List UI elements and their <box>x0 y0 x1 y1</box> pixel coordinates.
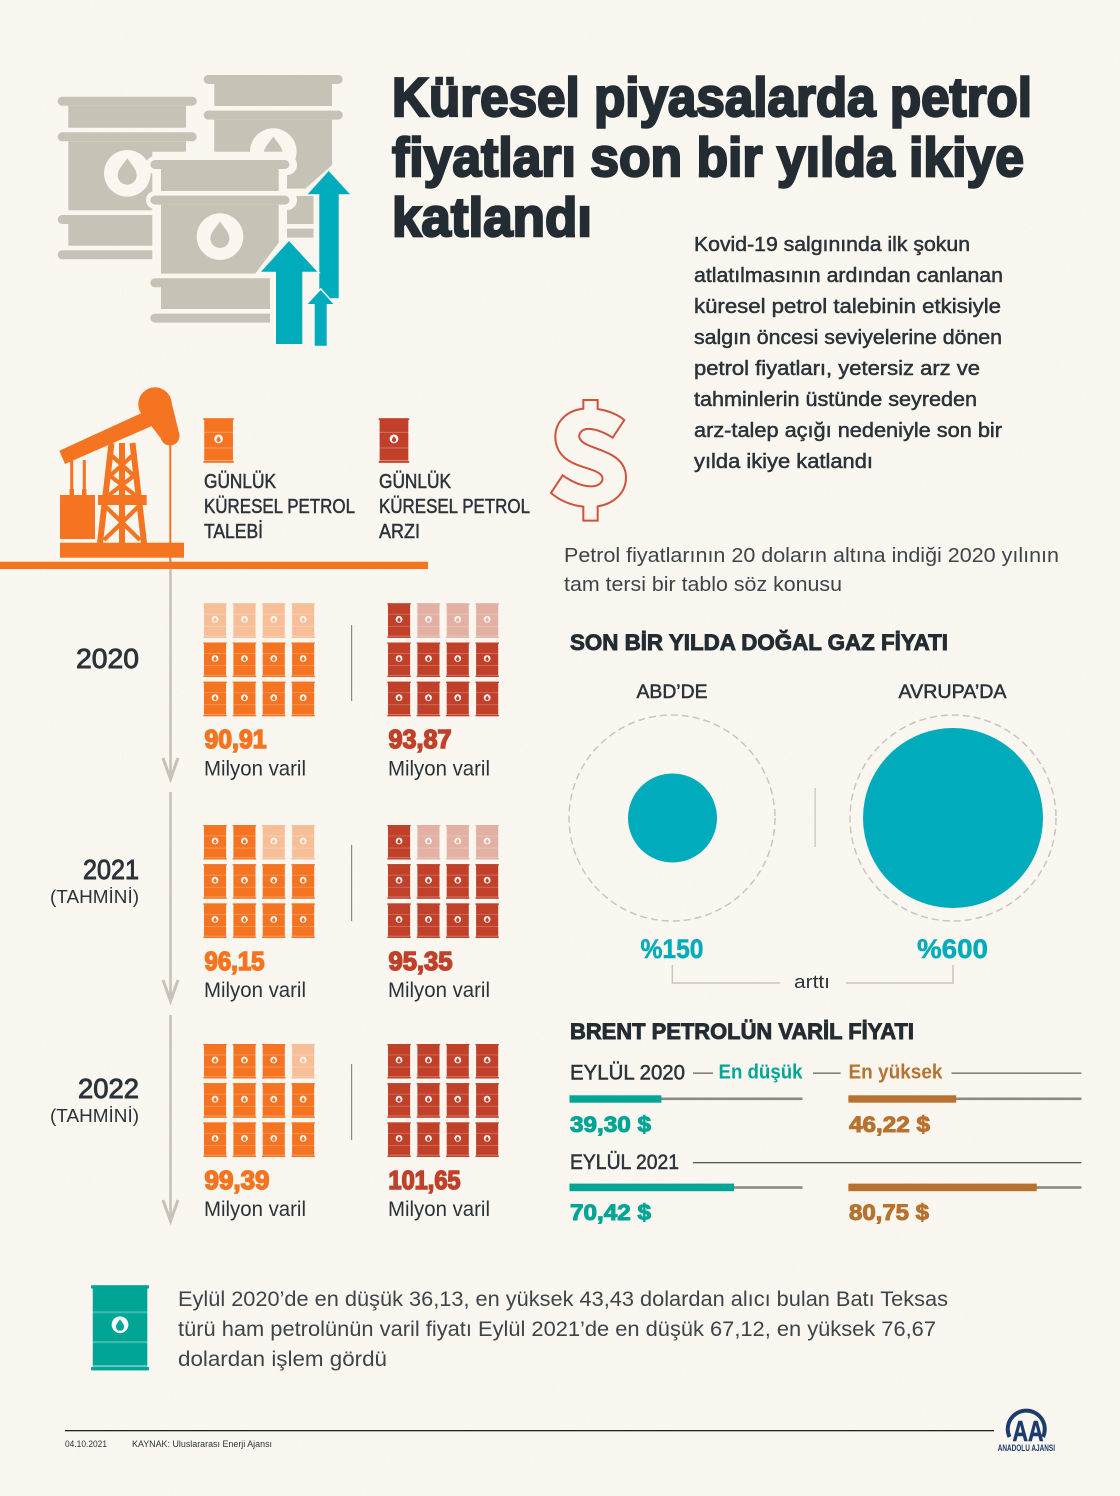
intro paragraph <box>694 234 1003 473</box>
barrel grid: demand 2022 <box>203 1044 315 1157</box>
intro paragraph: arz-talep açığı nedeniyle son bir <box>694 420 1002 442</box>
value: supply 2022 <box>388 1167 490 1221</box>
value: demand 2022: 99,39 <box>204 1167 270 1195</box>
value: demand 2021: 96,15 <box>204 948 264 976</box>
bar: highest 2021 <box>848 1184 1081 1191</box>
title: fiyatları son bir yılda ikiye <box>392 126 1024 188</box>
value: demand 2020 <box>204 726 306 781</box>
bracket label: increased <box>672 965 953 992</box>
row header: September 2020: EYLÜL 2020 <box>570 1062 685 1084</box>
barrel grid: supply 2020 <box>387 603 499 716</box>
logo: Anadolu Ajansi: AA <box>1012 1416 1044 1448</box>
legend: demand: GÜNLÜK <box>204 470 276 493</box>
value: supply 2020 <box>388 726 490 781</box>
intro paragraph: küresel petrol talebinin etkisiyle <box>694 296 1001 318</box>
value: demand 2020: Milyon varil <box>204 758 306 781</box>
note: WTI prices <box>178 1288 948 1371</box>
legend: supply <box>379 418 530 543</box>
legend: supply: GÜNLÜK <box>379 470 451 493</box>
intro paragraph: Kovid-19 salgınında ilk şokun <box>694 234 970 256</box>
year 2021 estimate: 2021 <box>83 854 139 885</box>
row header: September 2020: En düşük <box>718 1060 803 1084</box>
footer rule <box>65 1430 994 1431</box>
label: USA: ABD’DE <box>636 682 708 703</box>
divider 2022 <box>351 1064 352 1140</box>
legend: demand: KÜRESEL PETROL <box>204 495 355 518</box>
text: comparison with 2020: Petrol fiyatlarının 20 doların altına indiği 2020 yılının <box>564 544 1059 567</box>
title: katlandı <box>392 186 592 248</box>
legend: demand: TALEBİ <box>204 520 263 543</box>
circle chart: Europe <box>850 715 1056 921</box>
value: supply 2022: Milyon varil <box>388 1198 490 1221</box>
value: supply 2021: Milyon varil <box>388 979 490 1002</box>
value: lowest 2021: 70,42 $ <box>570 1200 652 1225</box>
legend: demand <box>203 418 355 543</box>
circle chart: USA <box>569 715 775 921</box>
value: supply 2022: 101,65 <box>388 1167 460 1195</box>
year 2022 estimate: 2022 <box>78 1073 139 1104</box>
bar: lowest 2020 <box>570 1095 802 1103</box>
title <box>392 66 1032 248</box>
barrel grid: supply 2022 <box>387 1044 499 1157</box>
note: WTI prices: Eylül 2020’de en düşük 36,13, en yüksek 43,43 dolardan alıcı bulan Batı Teksas <box>178 1288 948 1311</box>
intro paragraph: petrol fiyatları, yetersiz arz ve <box>694 358 980 380</box>
legend: supply: ARZI <box>379 520 420 543</box>
row header: September 2020 <box>570 1060 1081 1084</box>
value: demand 2022 <box>204 1167 306 1221</box>
value: demand 2021 <box>204 948 306 1002</box>
bar: highest 2020 <box>848 1095 1081 1103</box>
legend: supply: KÜRESEL PETROL <box>379 495 530 518</box>
divider 2021 <box>351 845 352 921</box>
bar: lowest 2021 <box>570 1184 802 1191</box>
intro paragraph: tahminlerin üstünde seyreden <box>694 389 977 411</box>
year 2020: 2020 <box>76 643 139 674</box>
heading: Brent price: BRENT PETROLÜN VARİL FİYATI <box>570 1019 914 1044</box>
logo: Anadolu Ajansi: ANADOLU AJANSI <box>998 1443 1055 1453</box>
value: demand 2022: Milyon varil <box>204 1198 306 1221</box>
year 2022 estimate <box>50 1073 139 1126</box>
barrel grid: supply 2021 <box>387 825 499 938</box>
year 2022 estimate: (TAHMİNİ) <box>50 1105 139 1126</box>
value: highest 2020: 46,22 $ <box>849 1112 931 1137</box>
year 2021 estimate <box>50 854 139 907</box>
footer source: KAYNAK: Uluslararası Enerji Ajansı <box>132 1439 272 1449</box>
heading: natural gas: SON BİR YILDA DOĞAL GAZ FİYATI <box>570 630 948 655</box>
arrow: timeline 2020 <box>163 569 178 779</box>
icon: pump jack <box>59 387 184 562</box>
divider 2020 <box>351 625 352 701</box>
value: Europe increase: %600 <box>917 934 988 964</box>
label: Europe: AVRUPA’DA <box>898 682 1007 703</box>
barrel grid: demand 2021 <box>203 825 315 938</box>
intro paragraph: yılda ikiye katlandı <box>694 451 873 473</box>
footer date: 04.10.2021 <box>65 1439 107 1449</box>
bracket label: increased: arttı <box>794 972 830 992</box>
text: comparison with 2020: tam tersi bir tablo söz konusu <box>564 573 842 596</box>
intro paragraph: atlatılmasının ardından canlanan <box>694 265 1003 287</box>
title: Küresel piyasalarda petrol <box>392 66 1032 128</box>
row header: September 2021: EYLÜL 2021 <box>570 1151 679 1174</box>
value: demand 2020: 90,91 <box>204 726 266 754</box>
intro paragraph: salgın öncesi seviyelerine dönen <box>694 327 1002 349</box>
value: supply 2021: 95,35 <box>388 948 452 976</box>
row header: September 2020: En yüksek <box>848 1060 943 1084</box>
note: WTI prices: dolardan işlem gördü <box>178 1348 387 1371</box>
logo: Anadolu Ajansi <box>998 1411 1055 1453</box>
barrel grid: demand 2020 <box>203 603 315 716</box>
year 2021 estimate: (TAHMİNİ) <box>50 886 139 907</box>
value: demand 2021: Milyon varil <box>204 979 306 1002</box>
icon: dollar sign <box>551 400 626 521</box>
orange ground line <box>0 562 428 569</box>
value: supply 2021 <box>388 948 490 1002</box>
note: WTI prices: türü ham petrolünün varil fiyatı Eylül 2021’de en düşük 67,12, en yüksek 76,67 <box>178 1318 936 1341</box>
value: highest 2021: 80,75 $ <box>849 1200 930 1225</box>
arrow: timeline 2021 <box>163 792 178 1001</box>
icon: oil barrels with rising arrows <box>58 75 350 346</box>
value: USA increase: %150 <box>640 934 704 964</box>
icon: teal barrel <box>91 1285 149 1370</box>
value: supply 2020: 93,87 <box>388 726 452 754</box>
text: comparison with 2020 <box>564 544 1059 596</box>
arrow: timeline 2022 <box>163 1015 178 1221</box>
value: supply 2020: Milyon varil <box>388 758 490 781</box>
value: lowest 2020: 39,30 $ <box>570 1112 652 1137</box>
